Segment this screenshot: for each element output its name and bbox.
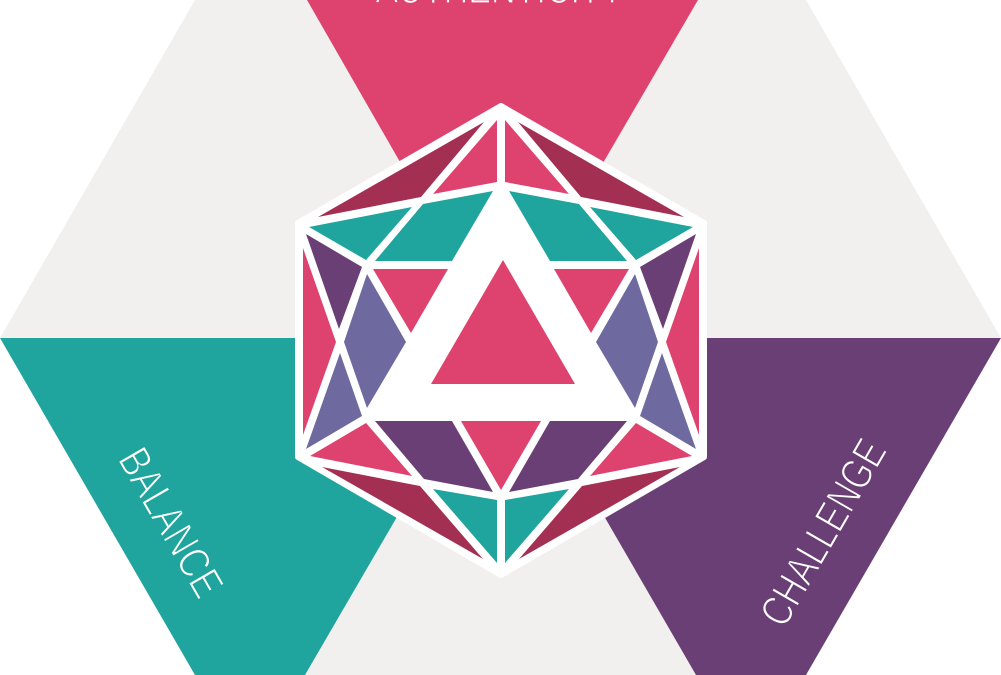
panel: bottom grey segment — [305, 338, 696, 675]
panel: upper left grey segment — [0, 0, 501, 338]
facets: maroon — [318, 122, 684, 559]
panel: authenticity — [307, 0, 698, 338]
panel: upper right grey segment — [501, 0, 1001, 338]
facets: periwinkle — [306, 274, 696, 449]
label: balance: BALANCE — [108, 439, 233, 606]
facets: purple — [306, 234, 696, 492]
panel: balance — [0, 338, 501, 675]
icon: faceted gem — [298, 106, 704, 575]
gem white base — [298, 106, 704, 575]
facets: teal — [309, 191, 693, 563]
centre pink triangle — [431, 260, 575, 384]
facets: pink — [303, 120, 699, 490]
label: challenge: CHALLENGE — [750, 431, 896, 635]
panel: challenge — [501, 338, 1001, 675]
